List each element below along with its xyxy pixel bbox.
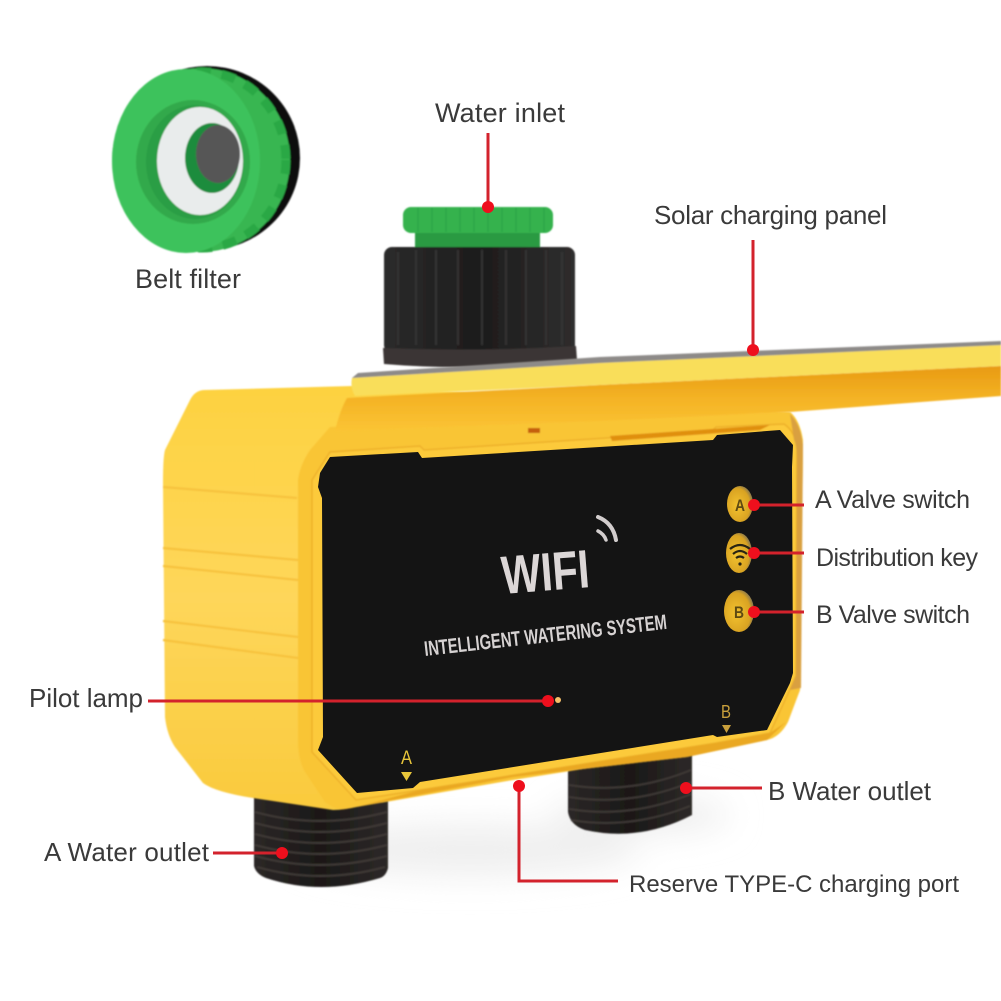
callout: B water outlet: B Water outlet — [768, 776, 932, 806]
callout: B valve switch: B Valve switch — [816, 601, 970, 629]
callout: pilot lamp — [29, 683, 554, 713]
side of housing — [163, 386, 803, 810]
callout: water inlet: Water inlet — [435, 98, 565, 128]
callout: A valve switch — [748, 486, 970, 514]
callout: solar charging panel — [654, 200, 887, 356]
callout: A water outlet: A Water outlet — [44, 837, 210, 867]
solar charging panel — [335, 341, 1001, 431]
product subtitle: INTELLIGENT WATERING SYSTEM — [423, 611, 668, 661]
pilot lamp — [555, 697, 561, 703]
callout: reserve TYPE-C charging port — [513, 780, 959, 898]
water outlet A — [254, 795, 388, 887]
button: A valve: A — [735, 496, 745, 515]
WIFI logo text: WIFI — [499, 539, 592, 606]
callout: pilot lamp: Pilot lamp — [29, 683, 143, 713]
black control panel — [318, 430, 793, 793]
button: B valve: B — [734, 603, 744, 622]
floor shadow — [300, 795, 730, 876]
callout: reserve TYPE-C charging port: Reserve TYPE-C charging port — [629, 871, 959, 898]
water inlet cap — [383, 207, 577, 367]
device body — [163, 386, 803, 810]
outlet mark B: B — [721, 702, 731, 722]
outlet mark A — [401, 748, 412, 781]
callout: A valve switch: A Valve switch — [815, 486, 970, 514]
outlet mark A: A — [401, 748, 412, 769]
front frame — [298, 412, 803, 809]
outlet mark B — [721, 702, 731, 733]
button: B valve — [724, 590, 754, 632]
heading: belt filter label: Belt filter — [135, 264, 241, 294]
callout: A water outlet — [44, 837, 288, 867]
callout: B water outlet — [680, 776, 932, 806]
callout: B valve switch — [748, 601, 970, 629]
callout: water inlet — [435, 98, 565, 213]
icon: belt filter close-up — [112, 66, 300, 253]
callout: solar charging panel: Solar charging panel — [654, 200, 887, 230]
button: A valve — [727, 486, 753, 522]
water outlet B — [568, 750, 692, 834]
callout: distribution key: Distribution key — [816, 544, 978, 572]
icon: wifi arcs — [598, 517, 616, 540]
button: distribution key — [726, 533, 752, 573]
